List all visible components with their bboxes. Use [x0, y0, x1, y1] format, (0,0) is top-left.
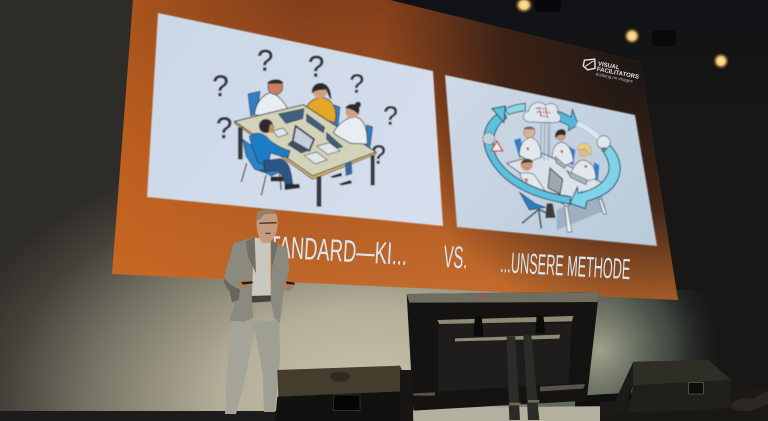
question marks: ?: [308, 51, 324, 84]
question marks: [212, 45, 398, 169]
question marks: ?: [371, 139, 386, 169]
caption: versus: VS.: [443, 239, 469, 275]
hands: [239, 280, 294, 291]
caption: standard AI: STANDARD—KI...: [256, 229, 408, 272]
shirt: [252, 237, 271, 297]
stage lights: [514, 0, 730, 70]
floor monitor speaker, right: [602, 360, 768, 421]
confidence monitor: [407, 292, 599, 420]
slide 2: facilitated method illustration: [445, 75, 657, 246]
icon: light bulb: [597, 136, 610, 151]
trousers: [225, 321, 256, 414]
logo: Visual Facilitators: VISUAL: [597, 61, 620, 71]
person right white shirt: [333, 117, 367, 144]
question marks: ?: [212, 70, 229, 103]
illustration: team inside feedback loop: [483, 102, 620, 232]
chair: [519, 192, 546, 210]
feedback loop arrow: [484, 111, 571, 204]
papers: [317, 143, 340, 155]
logo: Visual Facilitators: [582, 57, 641, 85]
monitor stand: [507, 335, 539, 420]
projection screen: [112, 0, 678, 300]
illustration: confused team around table: [212, 45, 398, 207]
light 1: [514, 0, 534, 14]
question marks: ?: [216, 112, 232, 145]
icon: warning triangle: [491, 141, 503, 151]
table legs: [238, 127, 375, 207]
slide 1: standard AI illustration: [147, 13, 443, 226]
table: [235, 105, 376, 176]
foreground blue chair: [243, 139, 265, 173]
logo: Visual Facilitators: FACILITATORS: [596, 67, 639, 81]
question marks: ?: [383, 101, 398, 131]
speaker: [224, 209, 295, 414]
slide captions: [256, 229, 631, 286]
logo: Visual Facilitators: thinking on images: [595, 72, 634, 84]
person back left: [255, 92, 289, 116]
light 3: [712, 52, 730, 70]
foreground person blue: [249, 133, 290, 166]
jacket: [224, 237, 253, 322]
person yellow: [304, 97, 336, 123]
chairs back: [248, 91, 260, 116]
light 2: [623, 27, 641, 45]
people: [519, 137, 542, 161]
head: [257, 210, 278, 243]
data beams: [541, 122, 550, 161]
question marks: ?: [257, 45, 273, 78]
icon: cloud with network: [523, 102, 561, 123]
left base of monitor: [400, 370, 413, 421]
floor monitor speaker, left: [275, 366, 413, 421]
question marks: ?: [350, 68, 364, 98]
stage floor: [0, 388, 768, 421]
table and shadow: [557, 190, 607, 230]
icon: gear: [483, 133, 495, 145]
laptops: [548, 168, 563, 194]
belt: [251, 295, 271, 303]
laptops: [279, 109, 304, 123]
